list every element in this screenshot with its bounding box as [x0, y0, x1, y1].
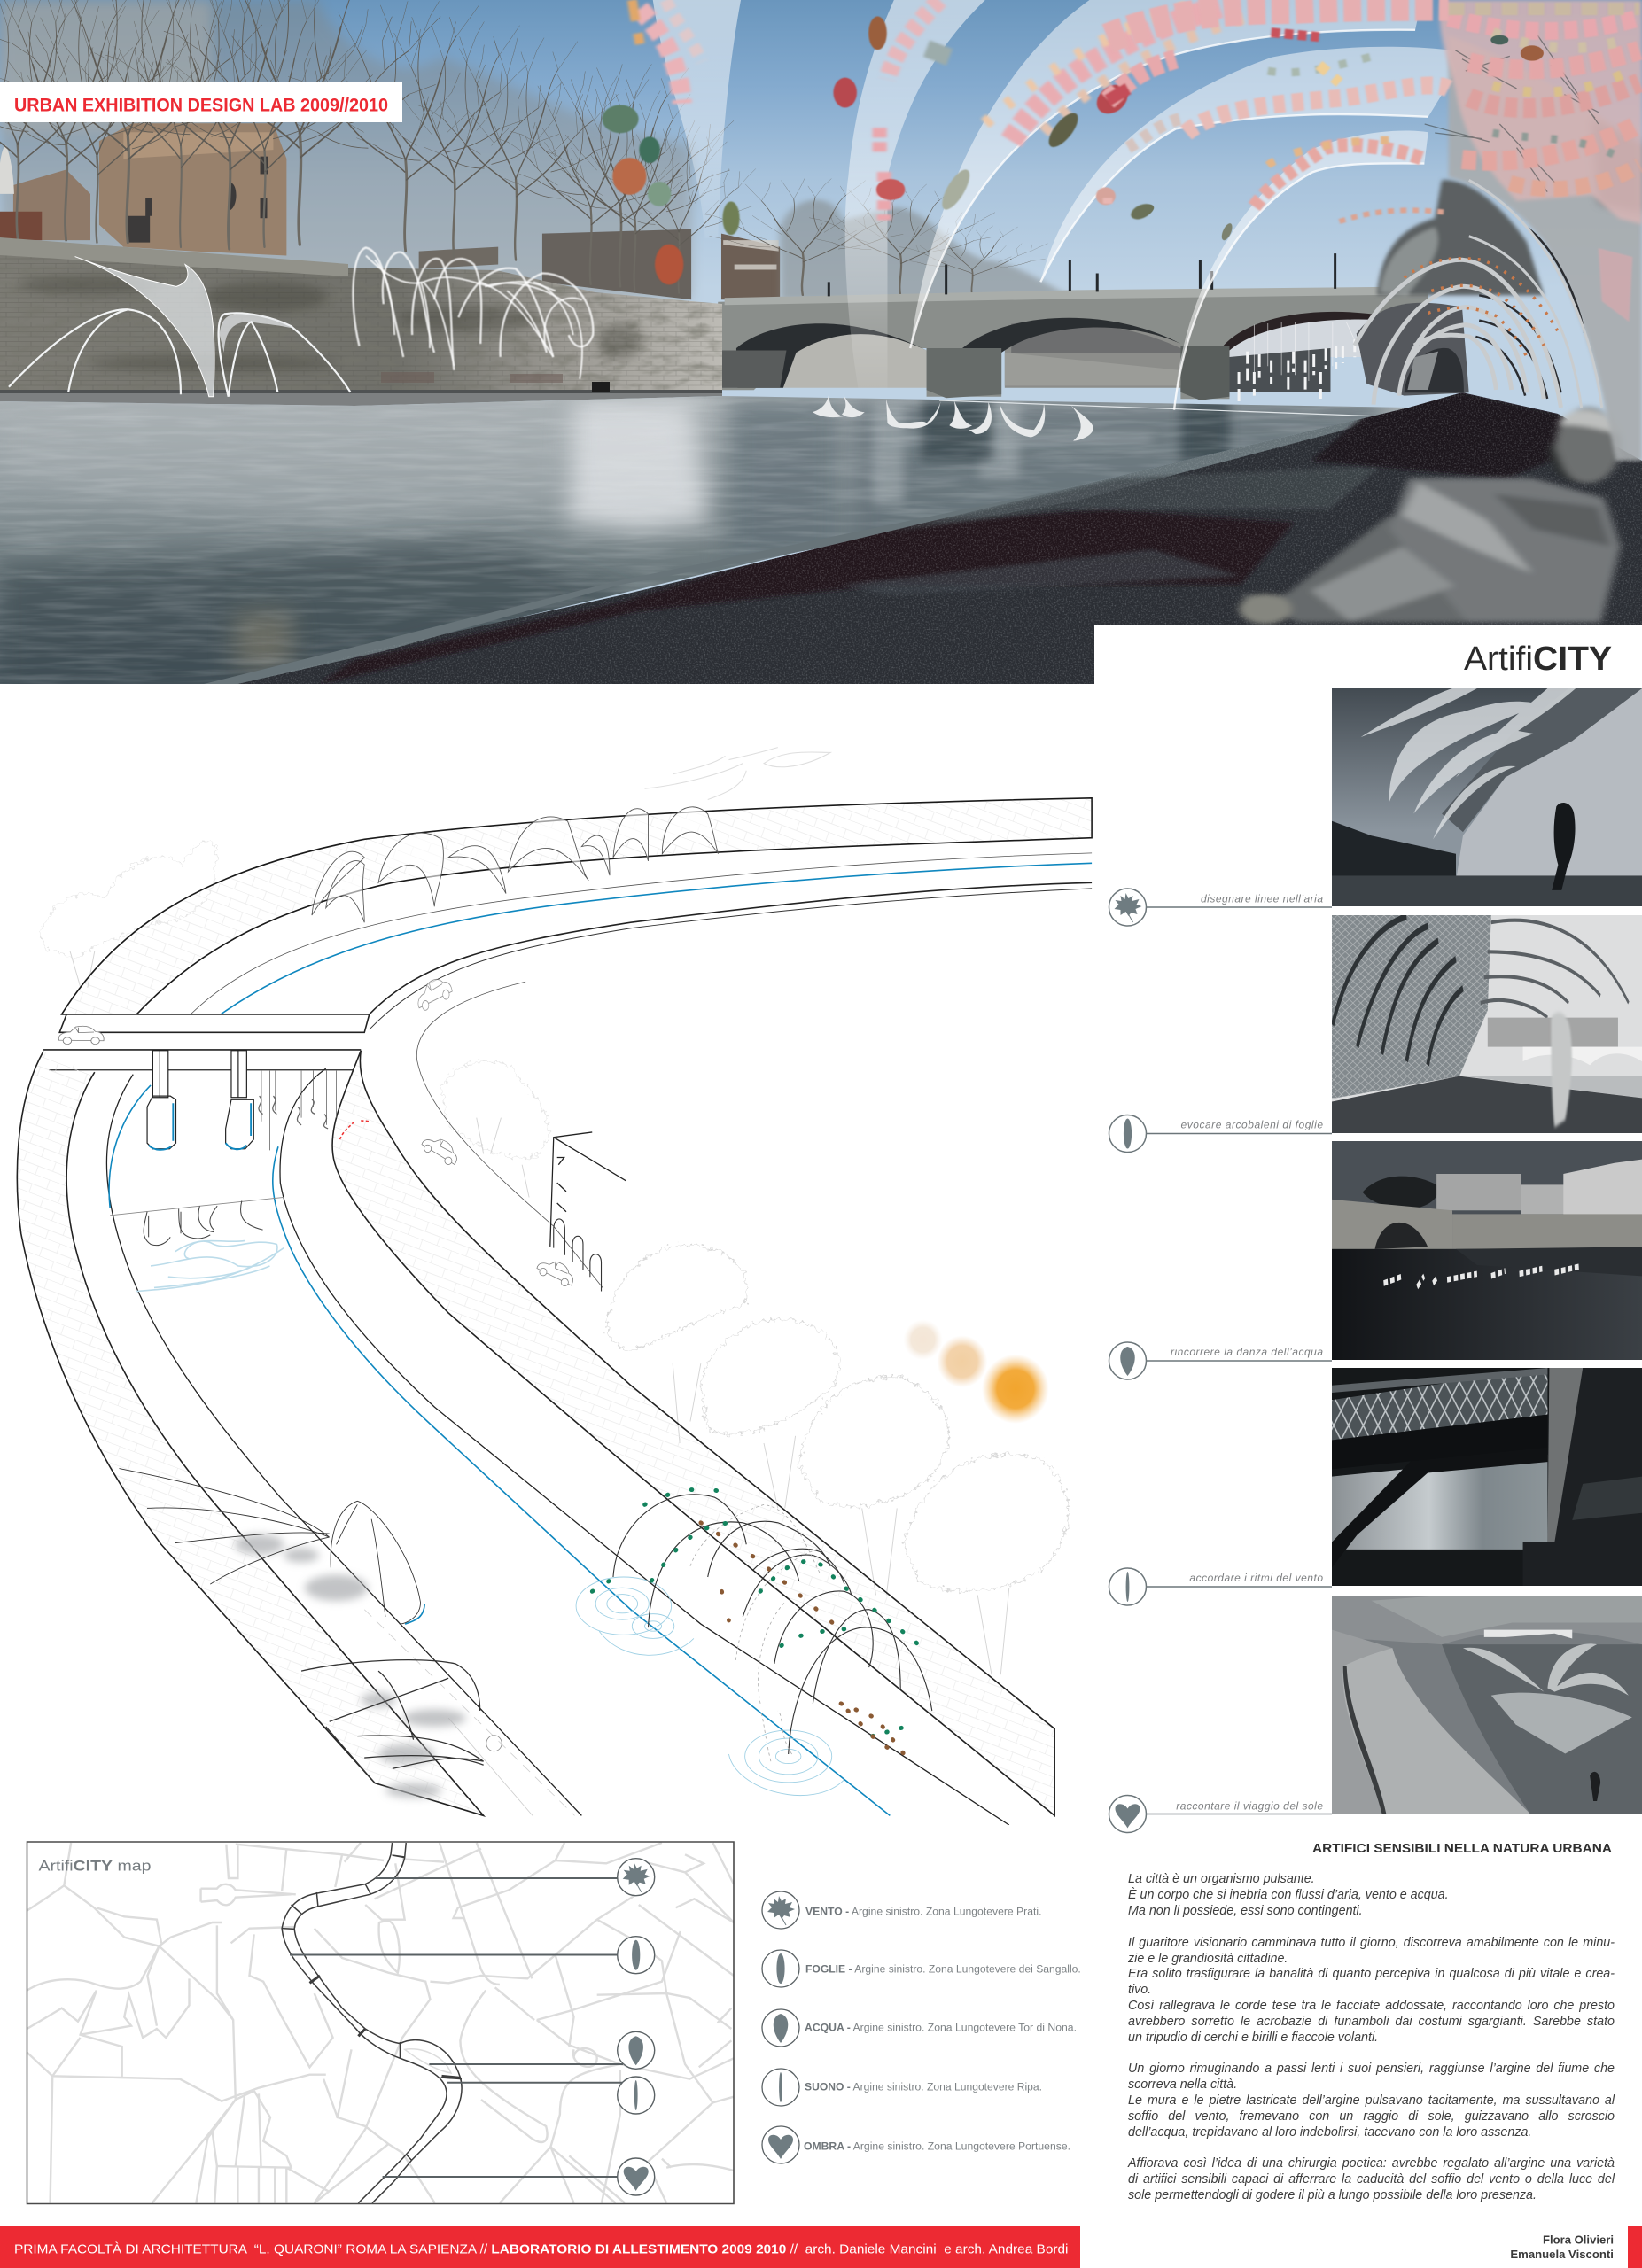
map frame [27, 1842, 734, 2204]
legend icon: vento [762, 1891, 799, 1929]
essay body text: Ma non li possiede, essi sono contingenti. [1128, 1904, 1363, 1918]
red chime notes [340, 1121, 370, 1139]
icon: water leaf [1109, 1342, 1332, 1379]
legend texts: FOGLIE - Argine sinistro. Zona Lungotevere dei Sangallo. [805, 1965, 1081, 1976]
icon: rainbow leaf [1109, 1115, 1332, 1152]
essay body text: Le mura e le pietre lastricate dell’argine pulsavano tacitamente, ma sussultavano al [1128, 2093, 1615, 2108]
bridge [712, 253, 1428, 400]
authors [1510, 2233, 1614, 2261]
artificial leaf arches: left bands [602, 0, 1621, 624]
wind swirls [645, 748, 830, 799]
wall wind structures [9, 248, 593, 397]
legend texts: OMBRA - Argine sinistro. Zona Lungotevere Portuense. [804, 2142, 1070, 2153]
left bank lines [106, 1075, 581, 1815]
essay body text: tivo. [1128, 1983, 1151, 1997]
right embankment wall [332, 1051, 1054, 1815]
sun sequence [903, 1319, 1049, 1424]
thumbnail photo 4: accordare i ritmi del vento [1332, 1368, 1642, 1586]
left embankment wall [17, 1052, 484, 1815]
essay body text: soffio del vento, fremevano con un raggio di sole, guizzavano allo scroscio [1128, 2109, 1615, 2124]
essay heading: ARTIFICI SENSIBILI NELLA NATURA URBANA [1312, 1841, 1612, 1856]
row captions: raccontare il viaggio del sole [1176, 1800, 1323, 1813]
thumbnail photo 5: raccontare il viaggio del sole [1332, 1596, 1642, 1814]
pink leaf canopy [1440, 0, 1642, 224]
green leaves [592, 1489, 929, 1736]
background trees [41, 841, 1069, 1591]
row captions: rincorrere la danza dell’acqua [1171, 1346, 1323, 1358]
upper embankment wall [62, 798, 1092, 1014]
suspended water forms [144, 1201, 263, 1246]
row captions: disegnare linee nell’aria [1201, 893, 1323, 905]
map title: Artifi CITY map [39, 1858, 151, 1875]
footer red band [0, 2226, 1080, 2268]
essay body text: Era solito trasfigurare la banalità di quanto percepiva in qualcosa di più vitale e crea- [1128, 1967, 1615, 1981]
water [0, 396, 1418, 691]
cars and building [58, 973, 626, 1751]
essay body text: di artifici sensibili capaci di afferrare la caducità del soffio del vento o della luce del [1128, 2172, 1615, 2186]
blue edge at shelter bay [405, 1604, 424, 1624]
icon: sun heart leaf [1109, 1795, 1332, 1832]
tree trunks [70, 951, 1009, 1674]
essay body text: zie e le grandiosità cittadine. [1128, 1952, 1288, 1966]
upper bank lines [191, 853, 1092, 1287]
distant trees and building [510, 65, 1077, 299]
legend icon: ombra [762, 2126, 799, 2163]
water swirl [136, 1240, 284, 1292]
map icon: leaves [618, 1937, 655, 1974]
upper wall wind blades [312, 807, 719, 922]
hero photomontage: Tiber river with installations [0, 0, 1642, 691]
legend texts: VENTO - Argine sinistro. Zona Lungotevere Prati. [805, 1907, 1042, 1918]
river bank paving [204, 390, 1642, 691]
essay body text: avrebbero sorretto le acrobazie di funamboli dai costumi sgargianti. Sarebbe stato [1128, 2015, 1615, 2029]
essay body text: Così rallegrava le corde tese tra le facciate addossate, raccontando loro che presto [1128, 1999, 1615, 2013]
translucent grey shell [1449, 35, 1642, 461]
thumbnail photo 2: evocare arcobaleni di foglie [1332, 915, 1642, 1133]
title box: ArtifiCITY: ArtifiCITY [1464, 641, 1612, 678]
bare trees [0, 0, 756, 261]
map icon: sound [618, 2077, 655, 2114]
essay body text: Un giorno rimuginando a passi lenti i suoi pensieri, raggiunse l’argine del fiume che [1128, 2062, 1615, 2076]
icon: wind leaf [1109, 889, 1332, 926]
brown leaves [701, 1523, 904, 1754]
seated figure [1240, 408, 1621, 624]
map of the Tiber [27, 1842, 734, 2204]
legend [762, 1891, 1081, 2163]
map icon: shade [618, 2158, 655, 2195]
embankment wall with fabric structures [0, 235, 727, 406]
floating water fans [813, 394, 1093, 441]
essay body text: Affiorava così l’idea di una chirurgia poetica: avrebbe regalato all’argine una varietà [1128, 2156, 1615, 2171]
essay body text [1127, 1872, 1615, 2202]
map icons [618, 1859, 655, 2195]
legend icon: foglie [762, 1950, 799, 1987]
thumbnail photo 1: disegnare linee nell'aria [1332, 688, 1642, 906]
legend icon: suono [762, 2069, 799, 2106]
red corner tab [1628, 2226, 1642, 2268]
legend texts [804, 1907, 1081, 2153]
label: lab title box [0, 82, 402, 122]
row captions: evocare arcobaleni di foglie [1180, 1118, 1323, 1130]
distant dark tree [1377, 180, 1544, 295]
thumbnail photo 3: rincorrere la danza dell'acqua [1332, 1141, 1642, 1360]
tunnel rings [1355, 180, 1602, 408]
right bank lines [273, 1068, 1009, 1825]
row icons and connector lines [1109, 889, 1332, 1832]
leaf arches [613, 1495, 932, 1754]
authors: Flora Olivieri [1543, 2233, 1614, 2247]
background building [0, 123, 691, 299]
essay body text: sole permettendogli di godere il più a lungo possibile della loro presenza. [1128, 2188, 1537, 2202]
hanging sound chimes [259, 1071, 337, 1150]
axonometric drawing of the river embankment [16, 747, 1093, 1825]
essay body text: scorreva nella città. [1128, 2078, 1237, 2092]
tunnel of arcs, leaf canopy and bridge drips [1108, 0, 1642, 461]
label: lab title box: URBAN EXHIBITION DESIGN LAB 2009//2010 [14, 96, 388, 115]
row captions [1171, 893, 1323, 1813]
fabric shelters shadows [235, 1534, 466, 1798]
essay body text: La città è un organismo pulsante. [1128, 1872, 1315, 1886]
legend icon: acqua [762, 2009, 799, 2047]
Tiber river segments [282, 1843, 462, 2203]
fabric shelters outlines [119, 1469, 484, 1783]
street network [27, 1843, 734, 2203]
legend texts: ACQUA - Argine sinistro. Zona Lungotevere Tor di Nona. [805, 2023, 1077, 2033]
row captions: accordare i ritmi del vento [1189, 1572, 1323, 1584]
map icon: wind [618, 1859, 655, 1896]
bridge drips [1239, 322, 1360, 401]
essay body text: dell’acqua, trepidavano al loro indebolirsi, tacevano con la loro assenza. [1128, 2125, 1531, 2140]
bridge piers [110, 1051, 284, 1216]
essay body text: È un corpo che si inebria con flussi d’aria, vento e acqua. [1128, 1888, 1449, 1902]
map icon: water [618, 2031, 655, 2069]
legend texts: SUONO - Argine sinistro. Zona Lungotevere Ripa. [805, 2083, 1042, 2093]
title box: ArtifiCITY [1094, 625, 1642, 684]
icon: sound leaf [1109, 1568, 1332, 1605]
bridge deck [43, 1014, 370, 1070]
dashed arch shadows [690, 1504, 820, 1761]
essay body text: un tripudio di cerchi e birilli e fiaccole volanti. [1128, 2031, 1378, 2045]
map callouts [290, 1878, 623, 2177]
footer red band: PRIMA FACOLTÀ DI ARCHITETTURA “L. QUARONI” ROMA LA SAPIENZA // LABORATORIO DI ALLESTIMENTO 2009 2010 // arch. Daniele Mancini e arch. Andrea Bordi [14, 2241, 1069, 2256]
authors: Emanuela Visconti [1510, 2248, 1614, 2261]
essay body text: Il guaritore visionario camminava tutto il giorno, discorreva amabilmente con le minu- [1128, 1936, 1615, 1950]
ripples [576, 1577, 844, 1796]
